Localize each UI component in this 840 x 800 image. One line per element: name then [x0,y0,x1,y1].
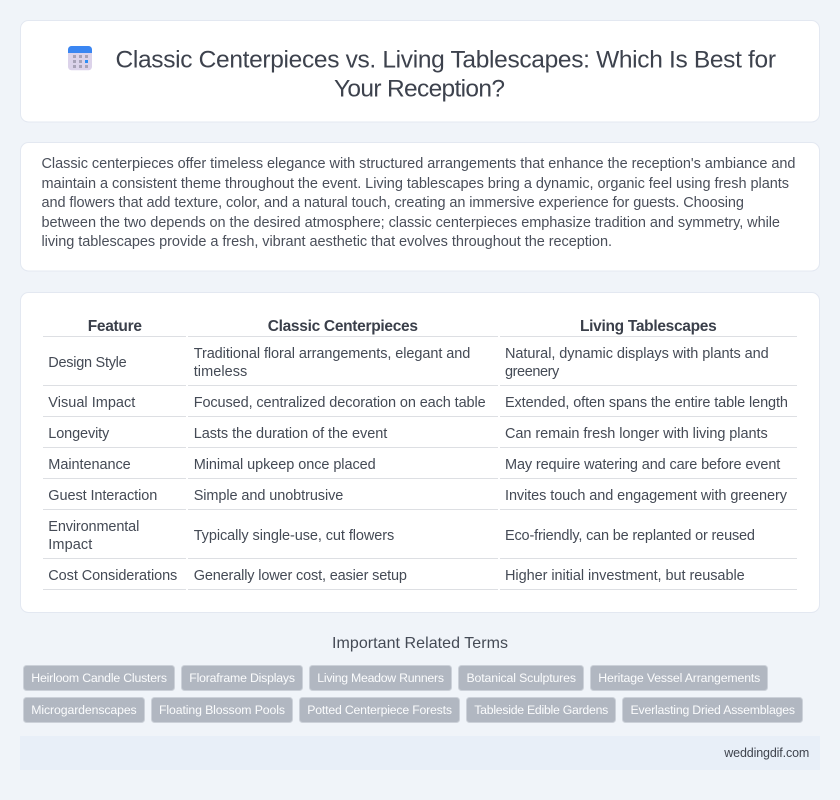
row: maintenance [48,457,780,473]
text block: introduction paragraph: and flowers that add texture, color, and a natural touch, creating an immersive experience for guests. Choosing [42,195,744,211]
title: Your Reception? [334,76,505,102]
row: environmental impact: Typically single-use, cut flowers [194,528,394,544]
text block: introduction paragraph: Classic centerpieces offer timeless elegance with structured arrangements that enhance the reception's ambiance and [42,156,796,172]
tag: Floating Blossom Pools: Floating Blossom Pools [159,703,285,717]
table rules [43,336,797,590]
tag group: related terms [24,666,802,722]
row: cost considerations: Higher initial investment, but reusable [505,568,745,584]
row: guest interaction: Guest Interaction [48,488,157,504]
text block: introduction paragraph: maintain a consistent theme throughout the event. Living tablescapes bring a dynamic, organic feel using fresh plants [42,176,789,192]
row: longevity [48,426,768,442]
row: environmental impact: Environmental [48,519,139,535]
tag: Floating Blossom Pools [152,698,292,722]
table header: Feature [88,318,142,335]
panel: comparison table [20,292,820,612]
tag: Heirloom Candle Clusters: Heirloom Candle Clusters [31,671,167,685]
row: cost considerations: Generally lower cost, easier setup [194,568,407,584]
tag: Living Meadow Runners [310,666,452,690]
row: cost considerations [48,568,745,584]
row: design style: Design Style [48,355,127,371]
tag: Heritage Vessel Arrangements: Heritage Vessel Arrangements [598,671,760,685]
panel: header [20,20,820,122]
row: visual impact: Visual Impact [48,395,135,411]
row: design style: Traditional floral arrangements, elegant and [194,346,470,362]
table header: Classic Centerpieces [268,318,418,335]
row: maintenance: May require watering and care before event [505,457,780,473]
row: longevity: Lasts the duration of the event [194,426,387,442]
tag: Botanical Sculptures [458,666,584,690]
row: environmental impact [48,519,755,553]
row: longevity: Can remain fresh longer with living plants [505,426,768,442]
tag: Floraframe Displays [182,666,302,690]
text block: introduction paragraph: living tablescapes provide a fresh, vibrant aesthetic that evolves throughout the reception. [42,234,612,250]
tag: Tableside Edible Gardens [466,698,616,722]
tag: Everlasting Dried Assemblages: Everlasting Dried Assemblages [630,703,795,717]
text block: introduction paragraph: between the two depends on the desired atmosphere; classic centerpieces emphasize tradition and symmetry, while [42,215,780,231]
title: Classic Centerpieces vs. Living Tablescapes: Which Is Best for [116,46,776,74]
footer: weddingdif.com [723,746,809,760]
tag: Heritage Vessel Arrangements [590,666,768,690]
tag: Botanical Sculptures: Botanical Sculptures [466,671,576,685]
row: design style: timeless [194,364,247,380]
row: environmental impact: Eco-friendly, can be replanted or reused [505,528,755,544]
footer [20,736,820,770]
row: maintenance: Maintenance [48,457,131,473]
row: visual impact: Extended, often spans the entire table length [505,395,788,411]
tag: Everlasting Dried Assemblages [622,698,802,722]
row: maintenance: Minimal upkeep once placed [194,457,376,473]
row: design style: greenery [505,364,560,380]
icon: calendar [68,46,92,70]
row: cost considerations: Cost Considerations [48,568,177,584]
tag: Potted Centerpiece Forests: Potted Centerpiece Forests [307,703,452,717]
text block: introduction paragraph [42,156,796,250]
table header: Living Tablescapes [580,318,717,335]
row: longevity: Longevity [48,426,110,442]
table header [88,318,717,335]
row: environmental impact: Impact [48,537,92,553]
heading: important related terms: Important Related Terms [332,635,508,652]
panel: introduction [20,142,820,271]
row: design style: Natural, dynamic displays with plants and [505,346,769,362]
row: guest interaction [48,488,788,504]
tag: Microgardenscapes [24,698,144,722]
tag: Potted Centerpiece Forests [300,698,460,722]
row: visual impact [48,395,788,411]
row: guest interaction: Simple and unobtrusive [194,488,343,504]
tag: Tableside Edible Gardens: Tableside Edible Gardens [474,703,608,717]
tag: Heirloom Candle Clusters [24,666,174,690]
tag: Floraframe Displays: Floraframe Displays [189,671,295,685]
title [116,46,776,102]
tag: Microgardenscapes: Microgardenscapes [31,703,137,717]
tag: Living Meadow Runners: Living Meadow Runners [317,671,444,685]
row: design style [48,346,769,380]
row: guest interaction: Invites touch and engagement with greenery [505,488,788,504]
row: visual impact: Focused, centralized decoration on each table [194,395,486,411]
